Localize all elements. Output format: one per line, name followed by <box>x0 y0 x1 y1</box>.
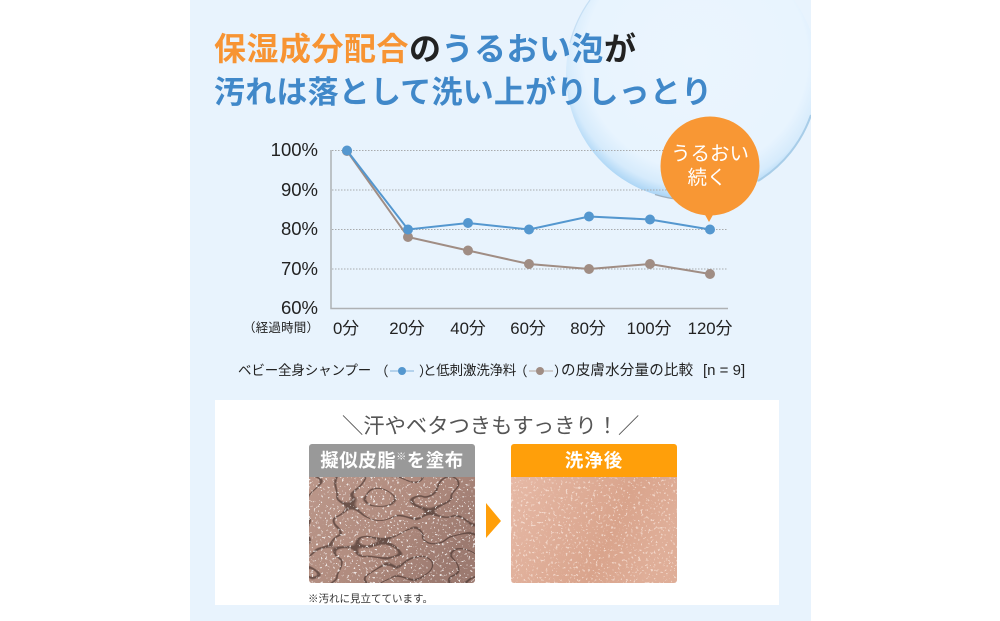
x axis title: （経過時間） <box>243 321 319 335</box>
panel heading: ＼汗やベタつきもすっきり！／ <box>342 414 639 438</box>
callout bubble: 続く <box>687 167 727 189</box>
legend text: cleanser: と低刺激洗浄料 <box>423 363 516 378</box>
x axis labels: 0分 <box>333 319 359 338</box>
chart axes <box>331 150 728 308</box>
y axis labels: 100% <box>271 139 318 160</box>
y axis labels: 80% <box>281 218 318 239</box>
legend key: brown <box>514 364 568 379</box>
panel: before and after <box>215 400 779 605</box>
legend caption <box>238 362 745 379</box>
after image card <box>511 444 677 583</box>
x axis labels: 60分 <box>510 319 546 338</box>
series: low irritation cleanser <box>342 146 715 279</box>
legend key: blue: （ <box>375 364 388 379</box>
title line 1: 保湿成分配合のうるおい泡が <box>214 31 637 67</box>
legend key: blue <box>375 364 432 379</box>
decoration: water bubble <box>566 0 811 200</box>
arrow <box>486 503 501 538</box>
before label: 擬似皮脂※を塗布 <box>320 450 464 471</box>
legend caption: ） <box>419 364 432 379</box>
legend text: comparison: の皮膚水分量の比較 <box>561 363 693 379</box>
after label <box>511 444 677 477</box>
y axis labels: 90% <box>281 179 318 200</box>
footnote: ※汚れに見立てています。 <box>308 593 433 605</box>
x axis labels: 80分 <box>570 319 606 338</box>
y axis labels: 60% <box>281 297 318 318</box>
x axis labels: 100分 <box>627 319 672 338</box>
series: baby shampoo <box>342 146 715 234</box>
y axis labels <box>271 139 318 318</box>
title line 2: 汚れは落として洗い上がりしっとり <box>214 75 712 110</box>
x axis labels: 120分 <box>688 319 733 338</box>
callout bubble <box>660 116 760 222</box>
before image card <box>309 444 475 583</box>
y axis labels: 70% <box>281 258 318 279</box>
title <box>214 31 712 110</box>
x axis labels: 20分 <box>389 319 425 338</box>
legend text: baby shampoo: ベビー全身シャンプー <box>238 363 371 378</box>
before skin photo <box>309 477 475 583</box>
x axis labels: 40分 <box>450 319 486 338</box>
callout bubble: うるおい <box>671 143 749 165</box>
panel: light blue background <box>190 0 811 621</box>
legend text: sample size: [n = 9] <box>703 362 745 379</box>
legend key: brown: （ <box>514 364 528 379</box>
legend key: brown: ） <box>554 364 568 379</box>
x axis labels <box>333 319 733 338</box>
line chart <box>243 116 760 338</box>
after skin photo <box>511 477 677 583</box>
before label <box>309 444 475 477</box>
after label: 洗浄後 <box>565 450 623 471</box>
